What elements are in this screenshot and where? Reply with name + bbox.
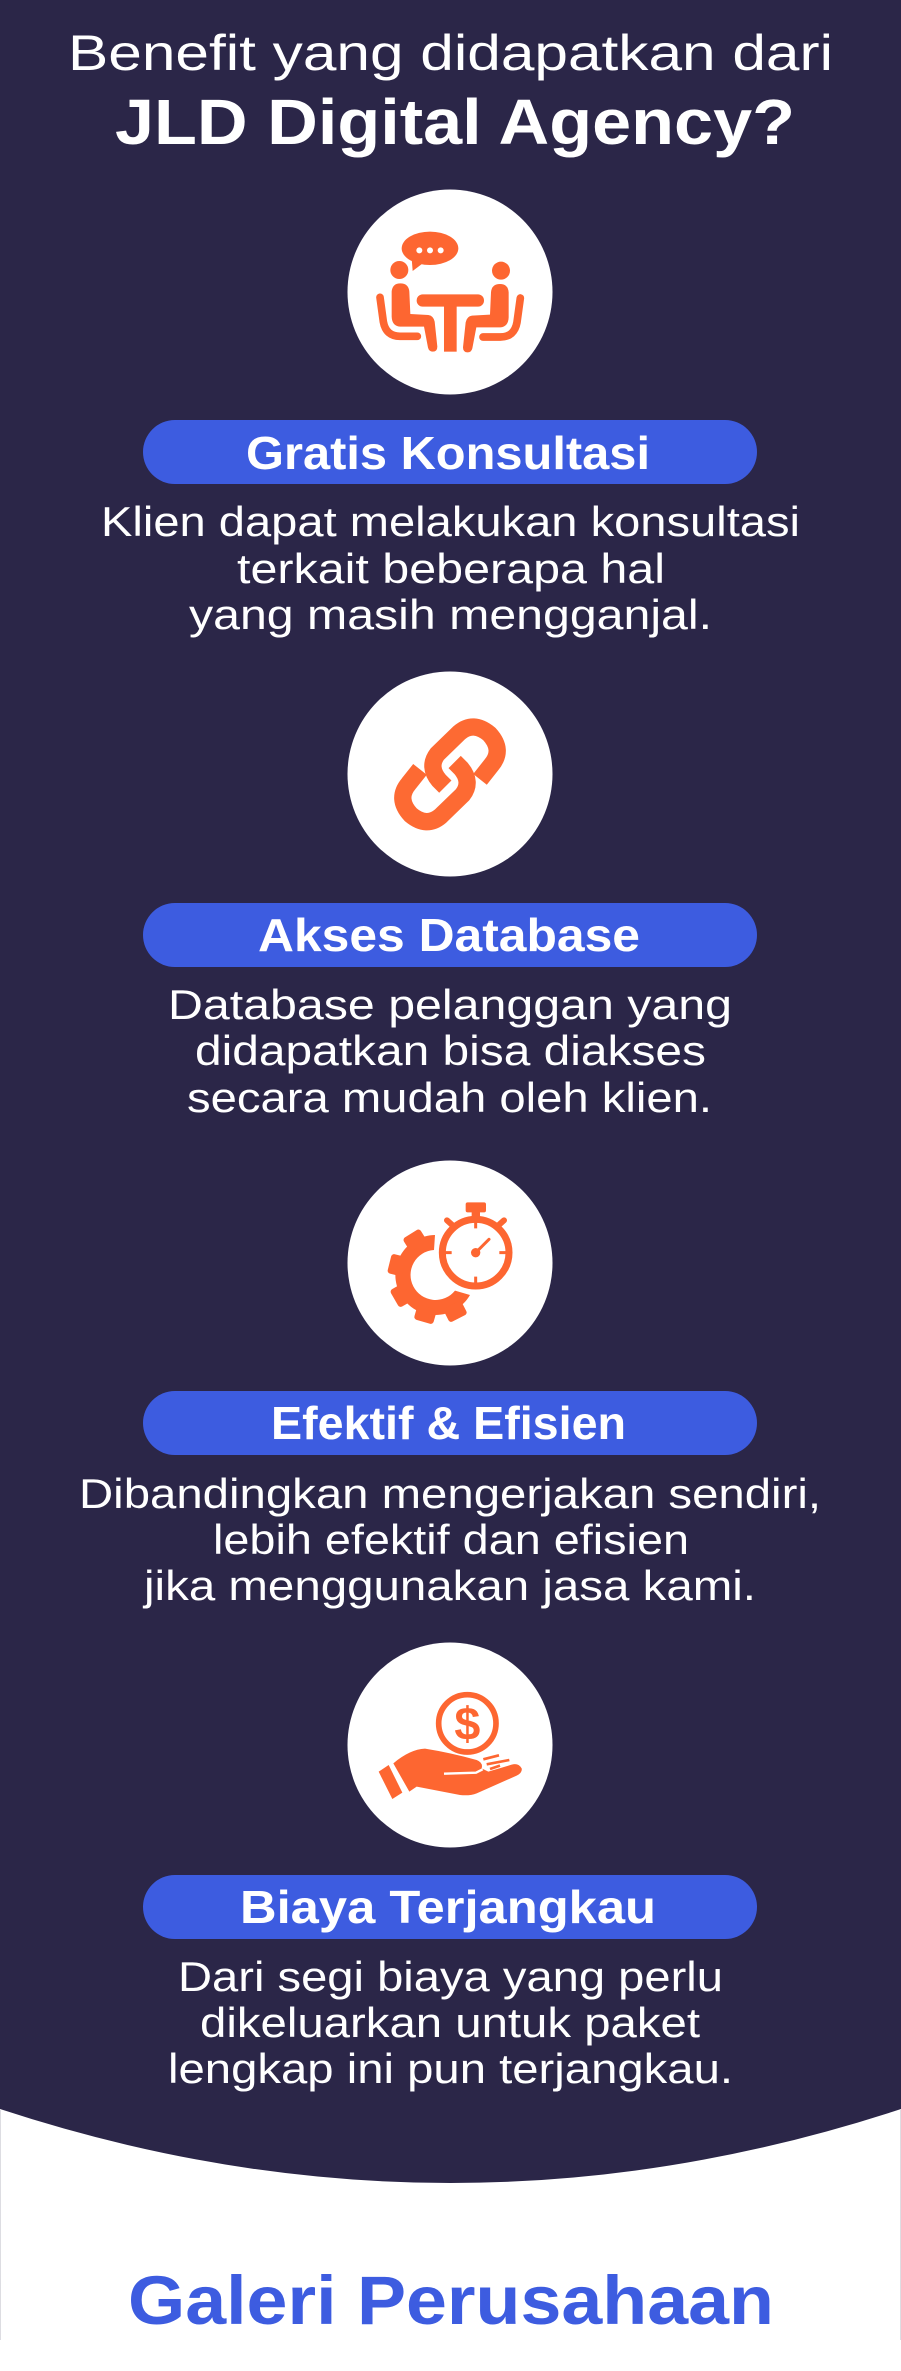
text block: biaya terjangkau: lengkap ini pun terjangkau. (168, 2045, 733, 2092)
icon: hand holding coin: $ (454, 1698, 480, 1750)
panel: akses database (143, 672, 757, 1121)
heading pill: efektif dan efisien: Efektif & Efisien (271, 1397, 626, 1449)
heading pill: biaya terjangkau (143, 1875, 757, 1939)
text block: efektif dan efisien: jika menggunakan jasa kami. (142, 1562, 756, 1609)
icon: chain link (348, 672, 552, 876)
icon: gear and stopwatch (348, 1160, 552, 1366)
text block: biaya terjangkau (168, 1953, 733, 2092)
heading pill: efektif dan efisien (143, 1391, 757, 1455)
text block: akses database: Database pelanggan yang (168, 981, 732, 1028)
heading pill: akses database: Akses Database (258, 909, 640, 961)
heading pill: gratis konsultasi (143, 420, 757, 484)
footer heading: Galeri Perusahaan (128, 2262, 774, 2339)
text block: gratis konsultasi: yang masih mengganjal. (189, 591, 712, 638)
text block: biaya terjangkau: dikeluarkan untuk paket (200, 1999, 700, 2046)
panel: efektif dan efisien (79, 1160, 821, 1609)
panel: gratis konsultasi (101, 190, 800, 638)
title (68, 25, 833, 158)
text block: efektif dan efisien: Dibandingkan mengerjakan sendiri, (79, 1470, 821, 1517)
text block: gratis konsultasi (101, 498, 800, 638)
text block: gratis konsultasi: Klien dapat melakukan konsultasi (101, 498, 800, 545)
text block: efektif dan efisien (79, 1470, 821, 1609)
text block: biaya terjangkau: Dari segi biaya yang perlu (178, 1953, 723, 2000)
text block: efektif dan efisien: lebih efektif dan efisien (213, 1516, 689, 1563)
icon: consultation at table (348, 190, 552, 394)
text block: akses database: didapatkan bisa diakses (195, 1027, 706, 1074)
heading pill: gratis konsultasi: Gratis Konsultasi (246, 427, 650, 479)
panel: biaya terjangkau (143, 1642, 757, 2092)
title: Benefit yang didapatkan dari (68, 25, 833, 81)
heading pill: biaya terjangkau: Biaya Terjangkau (240, 1881, 656, 1933)
text block: gratis konsultasi: terkait beberapa hal (237, 545, 665, 592)
title: JLD Digital Agency? (115, 86, 795, 158)
text block: akses database (168, 981, 732, 1121)
text block: akses database: secara mudah oleh klien. (187, 1074, 712, 1121)
heading pill: akses database (143, 903, 757, 967)
icon: hand holding coin (348, 1642, 552, 1848)
